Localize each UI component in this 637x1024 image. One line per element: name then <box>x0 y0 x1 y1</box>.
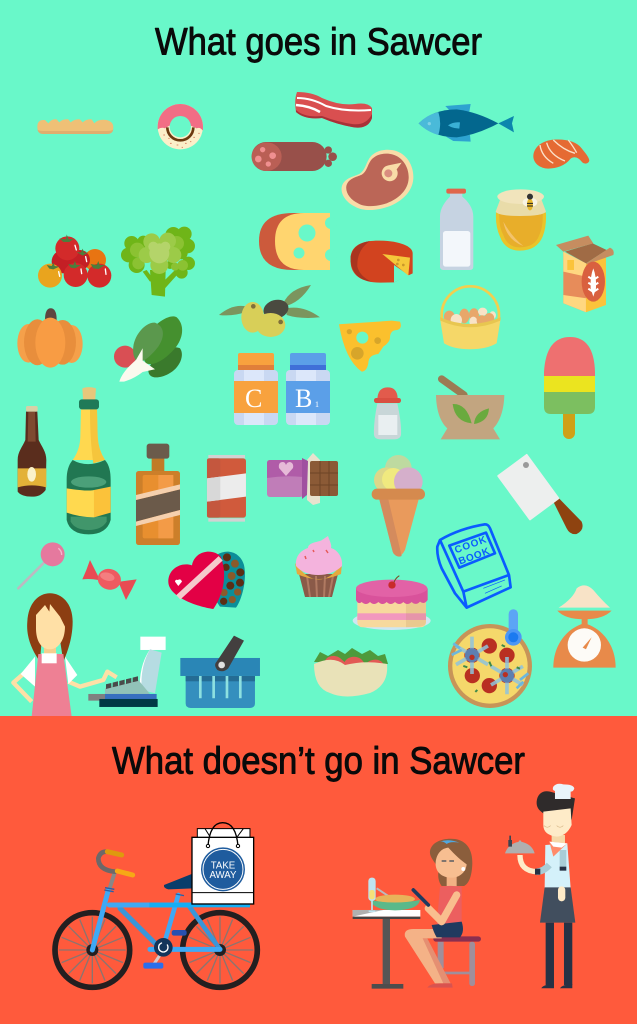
panel: what goes in Sawcer <box>0 0 637 717</box>
icon: chocolate bar <box>267 453 338 505</box>
icon: vitamin B1 jar: B <box>295 384 312 413</box>
icon: tomatoes <box>38 234 111 288</box>
icon: bacon <box>295 92 372 128</box>
icon: fish <box>419 104 514 142</box>
icon: olives <box>219 285 320 337</box>
icon: cake <box>353 576 431 630</box>
icon: milk bottle <box>440 189 473 270</box>
icon: shopping basket <box>180 636 260 708</box>
icon: cleaver <box>498 455 583 534</box>
icon: whisky bottle <box>136 444 180 545</box>
icon: cookbook: COOK <box>453 534 489 556</box>
bicycle frame <box>92 852 250 969</box>
icon: mortar and pestle <box>436 379 504 439</box>
icon: sausage <box>252 142 337 171</box>
icon: salt shaker <box>374 387 401 439</box>
chair <box>433 936 481 986</box>
icon: swiss cheese wheel <box>259 213 337 270</box>
title: what doesn't go in Sawcer: What doesn’t go in Sawcer <box>112 740 525 782</box>
table with meal <box>353 878 420 989</box>
icon: pumpkin <box>17 308 83 368</box>
panel: what doesn't go in Sawcer <box>0 716 637 1024</box>
seated woman <box>405 839 472 988</box>
icon: delivery bicycle with takeaway bag <box>55 823 257 987</box>
icon: cookbook: BOOK <box>457 546 492 567</box>
icon: champagne bottle <box>67 387 111 534</box>
icon: basket of eggs <box>440 286 501 349</box>
icon: cheese wedge <box>339 321 401 372</box>
icon: beer bottle <box>18 406 46 497</box>
illustration: woman at table on phone <box>353 839 481 989</box>
icon: donut <box>158 104 203 149</box>
illustration: chef with cloche <box>505 784 575 988</box>
icon: cash register <box>88 637 166 707</box>
icon: cookbook <box>437 524 511 608</box>
icon: salmon <box>533 139 589 169</box>
icon: vitamin B1 jar <box>286 353 330 425</box>
takeaway bag: TAKE <box>211 861 236 872</box>
takeaway bag <box>192 823 254 904</box>
takeaway bag: AWAY <box>209 870 237 881</box>
icon: vitamin C jar <box>234 353 278 425</box>
icon: honey jar <box>496 189 546 251</box>
icon: cashier woman <box>13 593 117 717</box>
icon: wrap sandwich <box>314 648 388 696</box>
icon: steak <box>342 150 413 210</box>
icon: heart chocolate box <box>168 552 245 609</box>
icon: vitamin C jar: C <box>245 384 262 413</box>
icon: kitchen scale <box>553 585 616 668</box>
icon: cereal box <box>556 236 614 312</box>
icon: tin can <box>207 455 246 522</box>
icon: gouda cheese <box>351 241 413 283</box>
icon: baguette <box>37 119 113 134</box>
icon: broccoli <box>121 227 195 297</box>
icon: pizza with frost and thermometer <box>448 609 532 708</box>
icon: ice lolly <box>544 337 595 439</box>
icon: leafy greens <box>114 316 182 382</box>
icon: lollipop <box>18 542 65 588</box>
icon: wrapped candy <box>82 560 137 600</box>
icon: vitamin B1 jar: 1 <box>315 400 319 409</box>
icon: ice cream cone <box>372 455 425 557</box>
title: what goes in Sawcer: What goes in Sawcer <box>155 22 482 64</box>
bicycle wheels <box>55 913 257 987</box>
icon: cupcake <box>295 536 342 597</box>
